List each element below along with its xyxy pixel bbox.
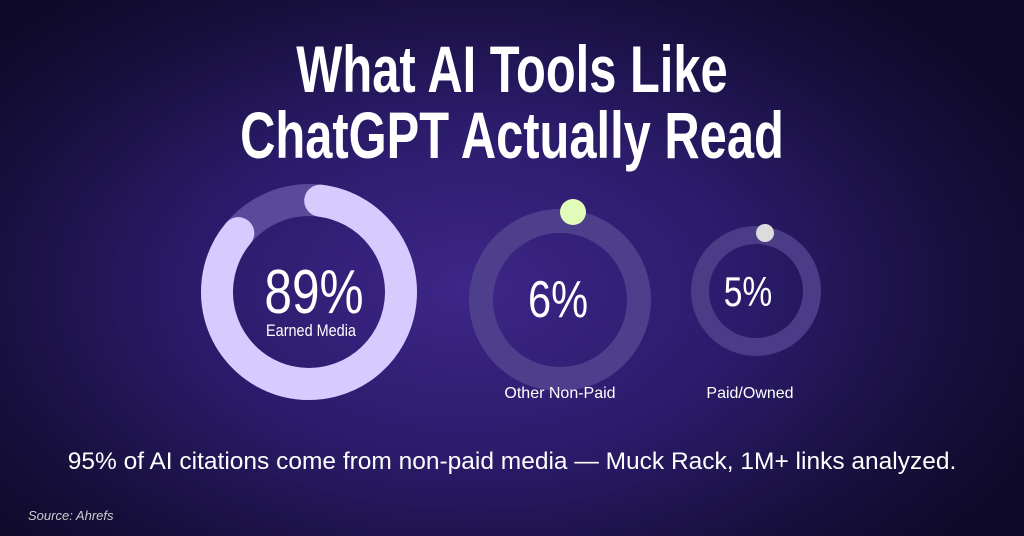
donut: other non-paid 6%: Other Non-Paid — [504, 385, 616, 402]
donut: paid/owned 5%: 5% — [724, 270, 772, 316]
source: Source: Ahrefs — [28, 508, 114, 523]
donut: earned media 89%: Earned Media — [266, 322, 356, 340]
donut: earned media 89%: 89% — [264, 257, 364, 326]
subtitle text: 95% of AI citations come from non-paid media — Muck Rack, 1M+ links analyzed. — [68, 448, 956, 475]
donut: other non-paid 6% — [481, 199, 639, 402]
donut: other non-paid 6%: 6% — [528, 270, 588, 328]
title: What AI Tools Like — [296, 32, 728, 106]
donut: paid/owned 5% — [700, 224, 812, 402]
title — [240, 32, 784, 172]
title: ChatGPT Actually Read — [240, 98, 784, 172]
donut: earned media 89% — [206, 189, 412, 395]
donut: paid/owned 5%: Paid/Owned — [706, 385, 794, 402]
